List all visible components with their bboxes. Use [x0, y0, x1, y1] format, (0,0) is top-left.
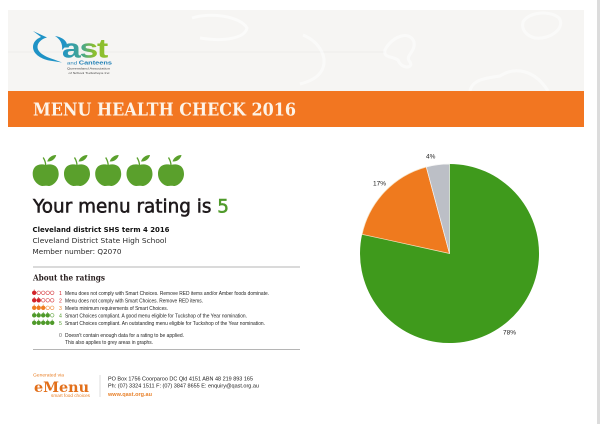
rating 4: 4 [59, 314, 62, 320]
footer contact: www.qast.org.au [107, 392, 152, 398]
rating 0 note [59, 333, 184, 346]
rating 5 [32, 320, 265, 327]
rating 5: 5 [59, 321, 62, 327]
logo tagline: Queensland Association [67, 66, 110, 70]
rating 2: 2 [59, 298, 62, 304]
logo name: and Canteens [67, 60, 112, 66]
rating 4 [32, 312, 247, 320]
footer brand: eMenu [33, 372, 91, 398]
rating 3: Meets minimum requirements of Smart Choices. [65, 306, 168, 312]
rating 3 [32, 304, 168, 312]
rating 0 note: This also applies to grey areas in graphs. [65, 340, 153, 346]
rating 0 note: Doesn't contain enough data for a rating to be applied. [65, 333, 184, 339]
rating 2 [32, 297, 203, 304]
page edge [597, 0, 600, 424]
slice: green 78% [360, 164, 539, 343]
school details: Cleveland district SHS term 4 2016 [32, 225, 170, 234]
rating heading: Your menu rating is 5 [32, 196, 229, 218]
logo mark: ast [62, 34, 108, 64]
rating 1: 1 [59, 291, 62, 297]
rating 3: 3 [59, 306, 62, 312]
footer brand: eMenu: smart food choices [51, 393, 91, 398]
footer contact: PO Box 1756 Coorparoo DC Qld 4151 ABN 48 219 893 165 [108, 376, 253, 382]
rating 2: Menu does not comply with Smart Choices. Remove RED items. [65, 298, 203, 304]
banner [8, 91, 584, 127]
label 17%: 17% [373, 180, 386, 188]
about heading: About the ratings [32, 272, 105, 282]
rating 0 note: 0 [59, 333, 62, 339]
slice: orange 17% [362, 167, 450, 254]
header panel [8, 10, 584, 91]
footer brand: eMenu: Generated via [33, 372, 64, 378]
footer contact: Ph: (07) 3324 1511 F: (07) 3847 8655 E: enquiry@qast.org.au [108, 384, 259, 390]
label 78%: 78% [503, 330, 516, 336]
ratings legend [32, 290, 269, 346]
school details: Cleveland District State High School [32, 236, 166, 245]
pie chart [360, 154, 539, 343]
slice: grey 4% [426, 164, 450, 254]
rating 5: Smart Choices compliant. An outstanding menu eligible for Tuckshop of the Year nomination. [65, 321, 265, 327]
footer contact [107, 376, 259, 398]
title: MENU HEALTH CHECK 2016 [33, 100, 296, 120]
label 4%: 4% [426, 154, 436, 160]
footer brand: eMenu: eMenu [34, 380, 89, 396]
rating 1 [32, 290, 269, 297]
school details: Member number: Q2070 [32, 247, 122, 256]
rating 1: Menu does not comply with Smart Choices. Remove RED items and/or Amber foods dominate. [65, 291, 269, 297]
logo [33, 31, 112, 75]
logo tagline line 2: of School Tuckshops Inc [68, 71, 110, 75]
icon: five apple rating [33, 155, 184, 186]
school details [32, 225, 170, 256]
rating 4: Smart Choices compliant. A good menu eligible for Tuckshop of the Year nomination. [65, 314, 247, 320]
